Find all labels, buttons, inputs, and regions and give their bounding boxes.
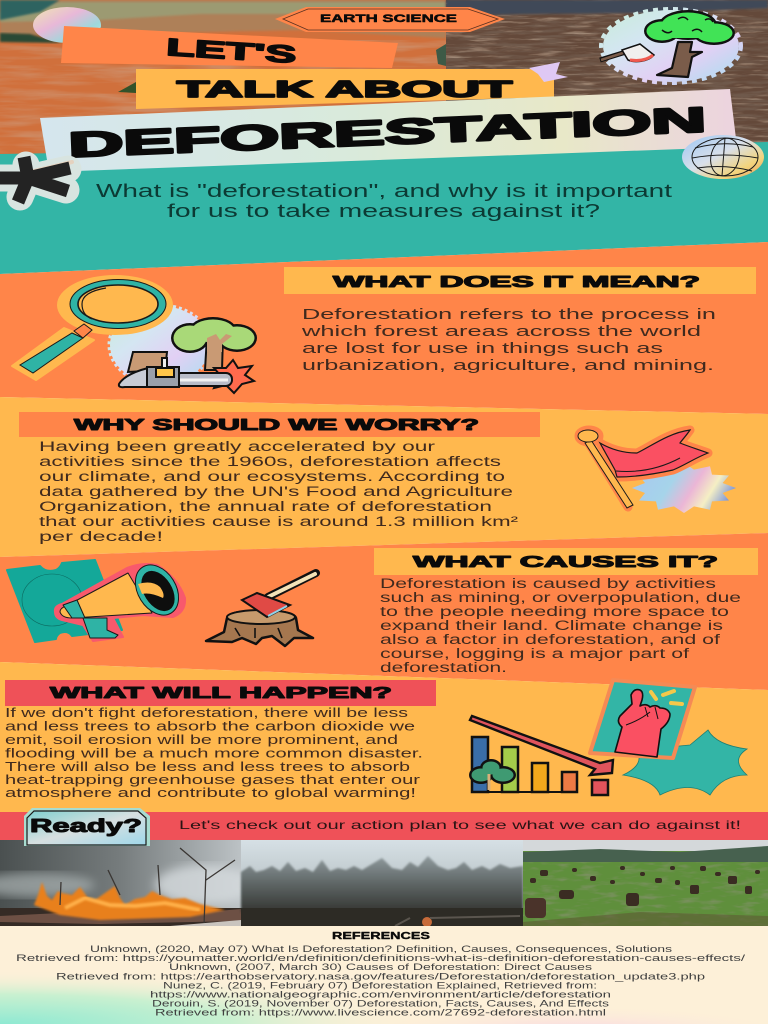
icon: teal burst <box>623 730 747 795</box>
heading: what will happen: WHAT WILL HAPPEN? <box>50 685 392 702</box>
icon: chainsaw and tree <box>119 317 257 393</box>
title: deforestation: DEFORESTATION <box>68 100 707 165</box>
icon: magnifying glass <box>12 275 173 380</box>
banner: ready call to action <box>0 812 768 840</box>
heading: what does it mean <box>284 267 756 294</box>
title: talk about <box>136 69 554 109</box>
text: why should we worry: that our activities cause is around 1.3 million km² <box>39 514 519 529</box>
heading: why should we worry: WHY SHOULD WE WORRY? <box>74 417 479 434</box>
text: what will happen: There will also be less and less trees to absorb <box>5 759 410 774</box>
panel: what does it mean background <box>0 242 768 414</box>
heading: what does it mean: WHAT DOES IT MEAN? <box>333 274 700 291</box>
banner: ready call to action: Let's check out our action plan to see what we can do against it! <box>179 818 741 832</box>
title: let's <box>61 26 398 69</box>
text: what does it mean: urbanization, agriculture, and mining. <box>302 357 714 374</box>
text: why should we worry: Having been greatly accelerated by our <box>39 439 436 454</box>
badge: ready: Ready? <box>30 816 142 836</box>
heading: what will happen <box>5 680 436 706</box>
photo: burning forest <box>0 840 255 926</box>
photo: field of stumps <box>523 840 768 926</box>
icon: sunburst behind tree <box>109 305 211 385</box>
references list: Derouin, S. (2019, November 07) Deforestation, Facts, Causes, And Effects <box>152 999 610 1009</box>
sticker: holographic blob <box>33 7 101 43</box>
references list: Retrieved from: https://youmatter.world/en/definition/definitions-what-is-definition-deforestation-causes-effects/ <box>16 953 746 963</box>
text: why should we worry: our climate, and our ecosystems. According to <box>39 469 505 484</box>
references list <box>16 944 746 1018</box>
heading: why should we worry <box>19 412 540 437</box>
text: why should we worry: Organization, the annual rate of deforestation <box>39 499 492 514</box>
text: what causes it: Deforestation is caused by activities <box>380 576 716 591</box>
text: what will happen: emit, soil erosion will be more prominent, and <box>5 732 398 747</box>
text: what does it mean <box>300 306 716 374</box>
text: what will happen: If we don't fight deforestation, there will be less <box>5 705 409 720</box>
text: what will happen: heat-trapping greenhouse gases that enter our <box>5 772 421 787</box>
heading: what causes it: WHAT CAUSES IT? <box>413 554 718 571</box>
text: what causes it: course, logging is a major part of <box>380 646 689 661</box>
sticker: globe <box>682 135 764 179</box>
text: what does it mean: Deforestation refers to the process in <box>302 306 716 323</box>
panel: references <box>0 926 768 1024</box>
text: what causes it: deforestation. <box>380 660 507 675</box>
text: why should we worry: per decade! <box>39 529 163 544</box>
references list: Retrieved from: https://www.livescience.com/27692-deforestation.html <box>155 1008 606 1018</box>
text: what will happen: atmosphere and contribute to global warming! <box>5 785 416 800</box>
text: why should we worry: data gathered by the UN's Food and Agriculture <box>39 484 513 499</box>
icon: axe in stump <box>206 573 316 646</box>
references list: https://www.nationalgeographic.com/environment/article/deforestation <box>150 990 611 1000</box>
references list: Unknown, (2020, May 07) What Is Deforestation? Definition, Causes, Consequences, Solutions <box>90 944 673 954</box>
text: what causes it: also a factor in deforestation, and of <box>380 632 720 647</box>
banner: earth science badge: EARTH SCIENCE <box>320 13 457 25</box>
header photo: cleared orange farmland <box>0 0 446 160</box>
intro question text: for us to take measures against it? <box>167 200 600 221</box>
text: what will happen: and less trees to absorb the carbon dioxide we <box>5 718 415 734</box>
photo: foggy forest <box>241 840 523 927</box>
text: what causes it: such as mining, or overpopulation, due <box>380 590 741 605</box>
references list: Unknown, (2007, March 30) Causes of Deforestation: Direct Causes <box>169 962 593 972</box>
header photo: cleared brown forest <box>446 0 768 145</box>
sticker: asterisk <box>0 157 72 202</box>
references list: Nunez, C. (2019, February 07) Deforestation Explained, Retrieved from: <box>163 980 597 990</box>
text: what will happen <box>5 705 423 800</box>
sticker: axe and tree <box>600 9 741 83</box>
text: what does it mean: are lost for use in things such as <box>302 340 663 357</box>
teal intro panel <box>0 142 768 274</box>
title: let's: LET'S <box>166 34 297 69</box>
icon: declining chart with tree <box>469 716 613 795</box>
icon: flag with holographic burst <box>578 430 736 513</box>
panel: what will happen background <box>0 662 768 813</box>
banner: earth science badge <box>275 7 505 32</box>
text: what causes it <box>380 576 741 675</box>
icon: hand card <box>590 680 695 758</box>
title: deforestation <box>40 89 737 172</box>
intro question text: What is "deforestation", and why is it important <box>96 180 672 201</box>
text: why should we worry: activities since the 1960s, deforestation affects <box>39 454 501 469</box>
text: what does it mean: which forest areas across the world <box>300 323 701 340</box>
intro question text <box>96 180 672 221</box>
references heading: REFERENCES <box>332 930 430 942</box>
panel: why should we worry background <box>0 397 768 557</box>
badge: ready <box>24 808 150 846</box>
text: why should we worry <box>39 439 519 544</box>
sticker: sparkle <box>529 62 568 82</box>
text: what will happen: flooding will be a much more common disaster. <box>5 746 423 760</box>
icon: ticket and megaphone <box>7 557 187 642</box>
panel: what causes it background <box>0 533 768 690</box>
heading: what causes it <box>374 548 758 575</box>
title: talk about: TALK ABOUT <box>177 76 512 102</box>
references list: Retrieved from: https://earthobservatory.nasa.gov/features/Deforestation/deforestation_update3.php <box>56 972 705 982</box>
text: what causes it: to the people needing more space to <box>380 604 729 619</box>
text: what causes it: expand their land. Climate change is <box>380 618 723 633</box>
